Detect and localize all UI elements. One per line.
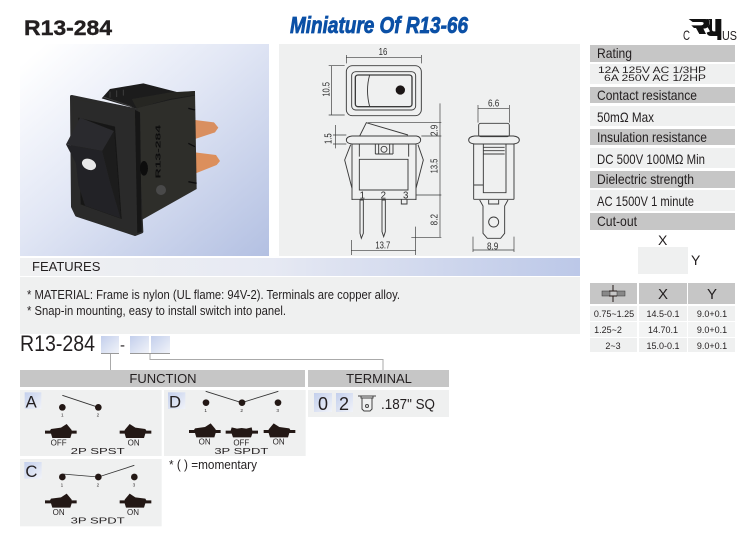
note: momentary: * ( ) =momentary [169, 457, 257, 472]
drawing: switch views: 2.9 [429, 125, 440, 136]
panel: terminal option: .187" SQ [381, 396, 435, 413]
drawing: switch views: 2 [381, 191, 386, 202]
spec table: ratings: Cut-out [597, 213, 637, 229]
diagram: cut-out X by Y: X [658, 232, 668, 248]
drawing: switch views: 8.9 [487, 242, 498, 253]
drawing: switch views: 10.5 [322, 82, 333, 97]
panel: function C 3P SPDT: C [25, 462, 37, 481]
table: cut-out dimensions: 14.70.1 [648, 325, 678, 335]
panel: function C 3P SPDT: 2 [97, 482, 100, 487]
text block: features [20, 277, 580, 334]
icon: cUL US certification mark: US [722, 28, 737, 43]
panel: product photo [20, 44, 269, 256]
diagram: cut-out X by Y: Y [691, 252, 701, 268]
spec table: ratings: 50mΩ Max [597, 109, 654, 125]
photo: rocker switch [66, 83, 220, 234]
drawing: switch views [322, 47, 519, 255]
text block: features: * MATERIAL: Frame is nylon (UL flame: 94V-2). Terminals are copper alloy. [27, 287, 400, 302]
drawing: switch views: 6.6 [488, 98, 499, 109]
icon: panel thickness [602, 285, 625, 302]
part number code [20, 331, 383, 370]
drawing: switch views: 8.2 [429, 214, 440, 225]
drawing: switch views: 3 [403, 191, 408, 202]
heading: terminal: TERMINAL [346, 371, 412, 386]
table: cut-out dimensions: 2~3 [605, 341, 621, 351]
panel: function A 2P SPST: A [26, 392, 38, 411]
table: cut-out dimensions: 15.0-0.1 [646, 341, 680, 351]
table: cut-out dimensions: 1.25~2 [594, 325, 622, 335]
text block: features: * Snap-in mounting, easy to install switch into panel. [27, 303, 286, 318]
panel: function C 3P SPDT: ON [127, 508, 139, 517]
part number code: - [120, 337, 125, 354]
panel: function A 2P SPST: 2P SPST [71, 447, 125, 456]
drawing: switch views: 1 [360, 191, 365, 202]
panel: function D 3P SPDT: 1 [204, 408, 207, 413]
spec table: ratings: Contact resistance [597, 87, 697, 103]
drawing: switch views: 13.7 [375, 241, 390, 252]
icon: cUL US certification mark: C [683, 27, 690, 43]
panel: function D 3P SPDT: ON [273, 438, 285, 447]
panel: function C 3P SPDT: 1 [61, 482, 64, 487]
spec table: ratings: 12A 125V AC 1/3HP [598, 65, 706, 75]
spec table: ratings: Rating [597, 45, 632, 61]
panel: function D 3P SPDT: 3P SPDT [214, 447, 269, 456]
diagram: cut-out X by Y [638, 232, 701, 274]
drawing: switch views: 16 [379, 47, 387, 58]
spec table: ratings: DC 500V 100MΩ Min [597, 151, 705, 167]
table: cut-out dimensions: 9.0+0.1 [697, 325, 727, 335]
heading: function: FUNCTION [129, 371, 197, 386]
panel: function A 2P SPST: 2 [97, 413, 100, 418]
panel: function D 3P SPDT: ON [199, 438, 211, 447]
panel: function D 3P SPDT: 3 [276, 408, 279, 413]
panel: function C 3P SPDT: 3 [133, 482, 136, 487]
panel: terminal option: 0 [318, 394, 328, 414]
photo: rocker switch: R13-284 [154, 123, 163, 178]
panel: function C 3P SPDT [20, 459, 162, 526]
heading: features: FEATURES [32, 259, 101, 274]
icon: cUL US certification mark [683, 19, 737, 43]
heading: function [20, 370, 305, 387]
spec table: ratings [590, 45, 735, 230]
part number code: R13-284 [20, 331, 95, 356]
heading: features [20, 258, 580, 276]
panel: function A 2P SPST: OFF [51, 438, 67, 447]
spec table: ratings: Dielectric strength [597, 171, 694, 187]
panel: function C 3P SPDT: 3P SPDT [71, 517, 125, 526]
panel: dimension drawing [279, 44, 580, 256]
drawing: switch views: 13.5 [429, 159, 440, 173]
table: cut-out dimensions: 9.0+0.1 [697, 309, 727, 319]
panel: terminal option: 2 [339, 394, 349, 414]
heading: terminal [308, 370, 449, 387]
drawing: switch views: 1.5 [324, 133, 335, 144]
table: cut-out dimensions: 9.0+0.1 [697, 341, 727, 351]
title: model number: R13-284 [24, 17, 112, 40]
table: cut-out dimensions: X [658, 286, 668, 303]
table: cut-out dimensions: 14.5-0.1 [646, 309, 680, 319]
panel: function D 3P SPDT: 2 [240, 408, 243, 413]
title: miniature of R13-66: Miniature Of R13-66 [290, 12, 468, 38]
panel: function A 2P SPST: ON [128, 438, 140, 447]
spec table: ratings: Insulation resistance [597, 129, 707, 145]
spec table: ratings: AC 1500V 1 minute [597, 193, 694, 209]
panel: terminal option [308, 390, 449, 417]
panel: function A 2P SPST: 1 [61, 413, 64, 418]
panel: function C 3P SPDT: ON [53, 508, 65, 517]
panel: function A 2P SPST [20, 390, 162, 456]
panel: function D 3P SPDT: D [169, 392, 181, 411]
spec table: ratings: 6A 250V AC 1/2HP [604, 73, 706, 83]
panel: function D 3P SPDT [164, 390, 306, 456]
panel: function D 3P SPDT: OFF [233, 438, 249, 447]
icon: quick-connect terminal [358, 396, 376, 411]
table: cut-out dimensions [590, 283, 735, 352]
table: cut-out dimensions: 0.75~1.25 [594, 309, 634, 319]
table: cut-out dimensions: Y [707, 286, 717, 303]
